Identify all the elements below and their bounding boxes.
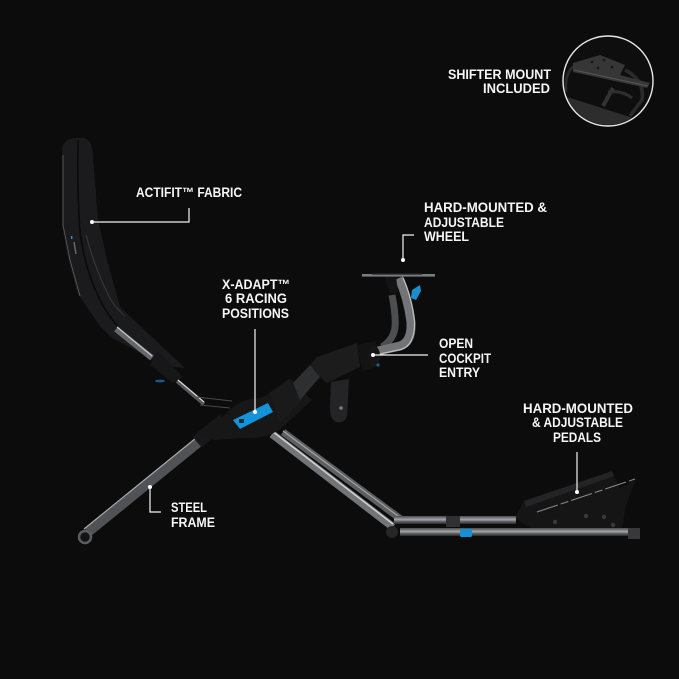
label: hard-mounted wheel bbox=[401, 200, 547, 262]
wheel plate bbox=[362, 273, 435, 293]
label: steel frame: FRAME bbox=[171, 515, 215, 530]
rear steel leg bbox=[79, 420, 224, 543]
label: shifter mount: INCLUDED bbox=[483, 81, 550, 96]
label: hard-mounted pedals: & ADJUSTABLE bbox=[532, 415, 623, 430]
leader: pedals bbox=[575, 452, 579, 494]
floor rails bbox=[386, 516, 640, 539]
seat frame tubes and pan bbox=[116, 327, 232, 408]
blue knob bbox=[411, 285, 421, 300]
inset: shifter mount detail bbox=[560, 36, 653, 130]
label: actifit fabric: ACTIFIT™ FABRIC bbox=[136, 185, 242, 200]
label: hard-mounted pedals: HARD-MOUNTED bbox=[523, 401, 633, 416]
label: x-adapt: POSITIONS bbox=[222, 306, 289, 321]
label: hard-mounted pedals bbox=[523, 401, 633, 494]
leader: steel frame bbox=[148, 485, 161, 512]
front steel leg bbox=[272, 431, 402, 527]
label: actifit fabric bbox=[90, 185, 242, 224]
label: steel frame: STEEL bbox=[171, 500, 207, 515]
label: hard-mounted wheel: WHEEL bbox=[424, 229, 469, 244]
label: shifter mount bbox=[448, 67, 552, 96]
label: open cockpit entry: ENTRY bbox=[439, 365, 480, 380]
label: hard-mounted pedals: PEDALS bbox=[553, 430, 601, 445]
label: steel frame bbox=[148, 485, 215, 530]
label: open cockpit entry: OPEN bbox=[439, 336, 473, 351]
blue rail clip bbox=[460, 529, 472, 537]
label: x-adapt: X-ADAPT™ bbox=[222, 277, 290, 292]
wheel mount tubes bbox=[378, 278, 421, 354]
lever handle bbox=[330, 379, 349, 422]
front arm bbox=[270, 341, 380, 423]
label: open cockpit entry: COCKPIT bbox=[439, 351, 492, 366]
chair illustration bbox=[62, 138, 640, 543]
blue x-adapt adjuster bbox=[233, 403, 273, 429]
label: hard-mounted wheel: ADJUSTABLE bbox=[424, 215, 504, 230]
label: hard-mounted wheel: HARD-MOUNTED & bbox=[424, 200, 547, 215]
pedal deck bbox=[515, 471, 636, 528]
leader: wheel bbox=[401, 235, 414, 262]
label: x-adapt: 6 RACING bbox=[225, 291, 287, 306]
leader: x-adapt bbox=[253, 329, 257, 414]
label: shifter mount: SHIFTER MOUNT bbox=[448, 67, 552, 82]
leader: open cockpit bbox=[371, 353, 428, 357]
leader: actifit fabric bbox=[90, 208, 189, 224]
hub bracket bbox=[200, 378, 312, 440]
seat back bbox=[62, 138, 185, 368]
label: x-adapt bbox=[222, 277, 290, 414]
label: open cockpit entry bbox=[371, 336, 492, 380]
